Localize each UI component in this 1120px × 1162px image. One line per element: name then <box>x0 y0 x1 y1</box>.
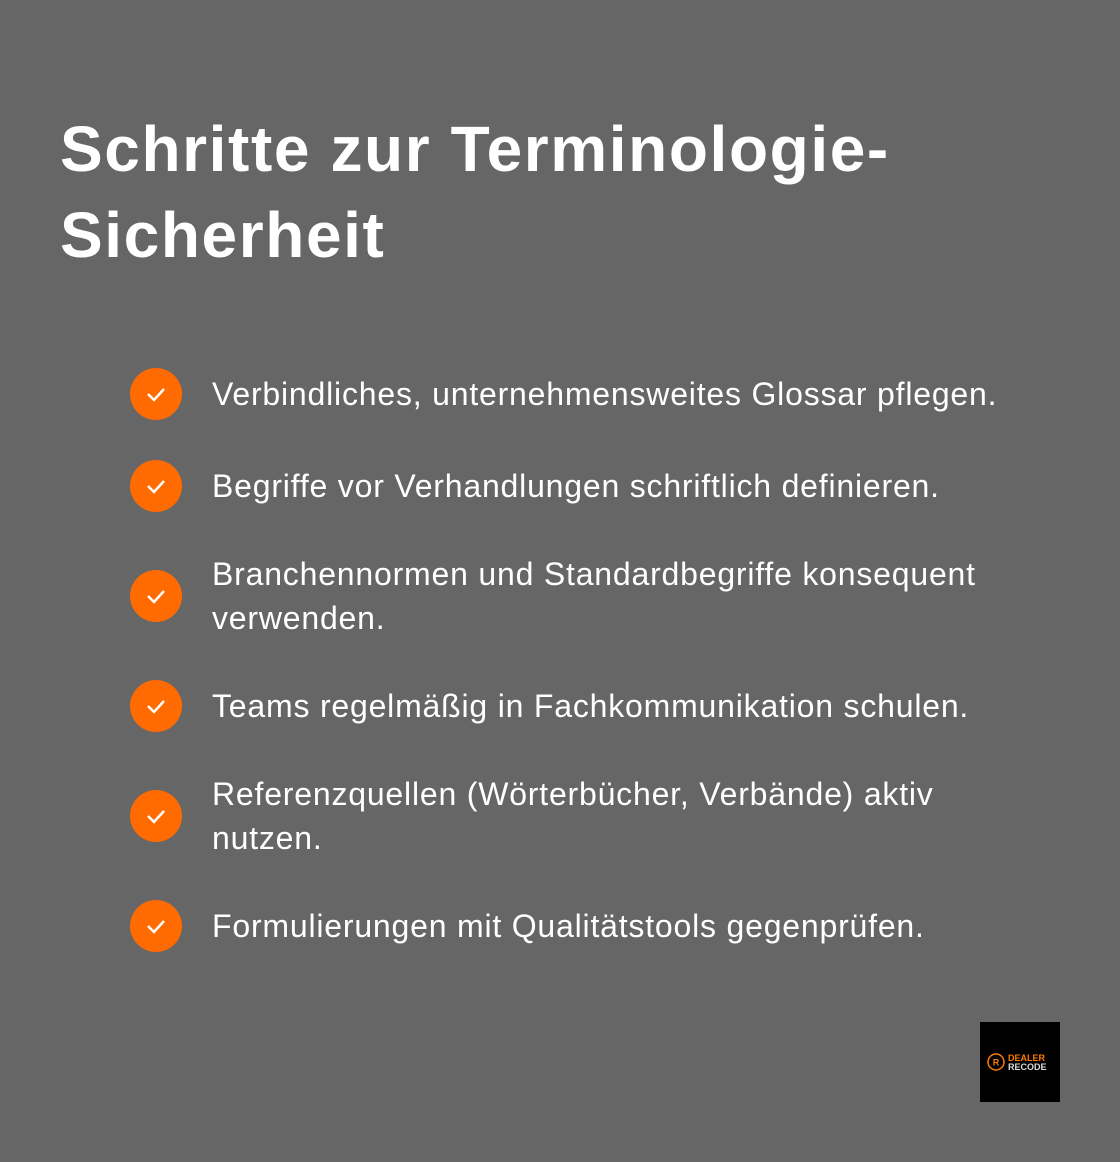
text: Begriffe vor Verhandlungen schriftlich definieren. <box>212 468 940 504</box>
text: Branchennormen und Standardbegriffe konsequent <box>212 556 976 592</box>
icon: check <box>130 368 182 420</box>
icon: check <box>130 900 182 952</box>
item 4 <box>130 680 969 732</box>
logo: DEALER <box>1008 1053 1046 1063</box>
text: verwenden. <box>212 600 385 636</box>
title: Sicherheit <box>60 199 385 271</box>
logo: R <box>993 1058 1000 1068</box>
item 5 <box>130 776 934 856</box>
item 6 <box>130 900 925 952</box>
item 3 <box>130 556 976 636</box>
text: Teams regelmäßig in Fachkommunikation schulen. <box>212 688 969 724</box>
text: Formulierungen mit Qualitätstools gegenprüfen. <box>212 908 925 944</box>
title: Schritte zur Terminologie- <box>60 113 890 185</box>
text: nutzen. <box>212 820 323 856</box>
icon: check <box>130 570 182 622</box>
logo: RECODE <box>1008 1062 1047 1072</box>
icon: check <box>130 680 182 732</box>
icon: check <box>130 790 182 842</box>
text <box>212 776 934 856</box>
text: Referenzquellen (Wörterbücher, Verbände) aktiv <box>212 776 934 812</box>
text: Verbindliches, unternehmensweites Glossar pflegen. <box>212 376 997 412</box>
icon: check <box>130 460 182 512</box>
title <box>60 113 890 271</box>
text <box>212 556 976 636</box>
item 1 <box>130 368 997 420</box>
item 2 <box>130 460 940 512</box>
logo <box>980 1022 1060 1102</box>
